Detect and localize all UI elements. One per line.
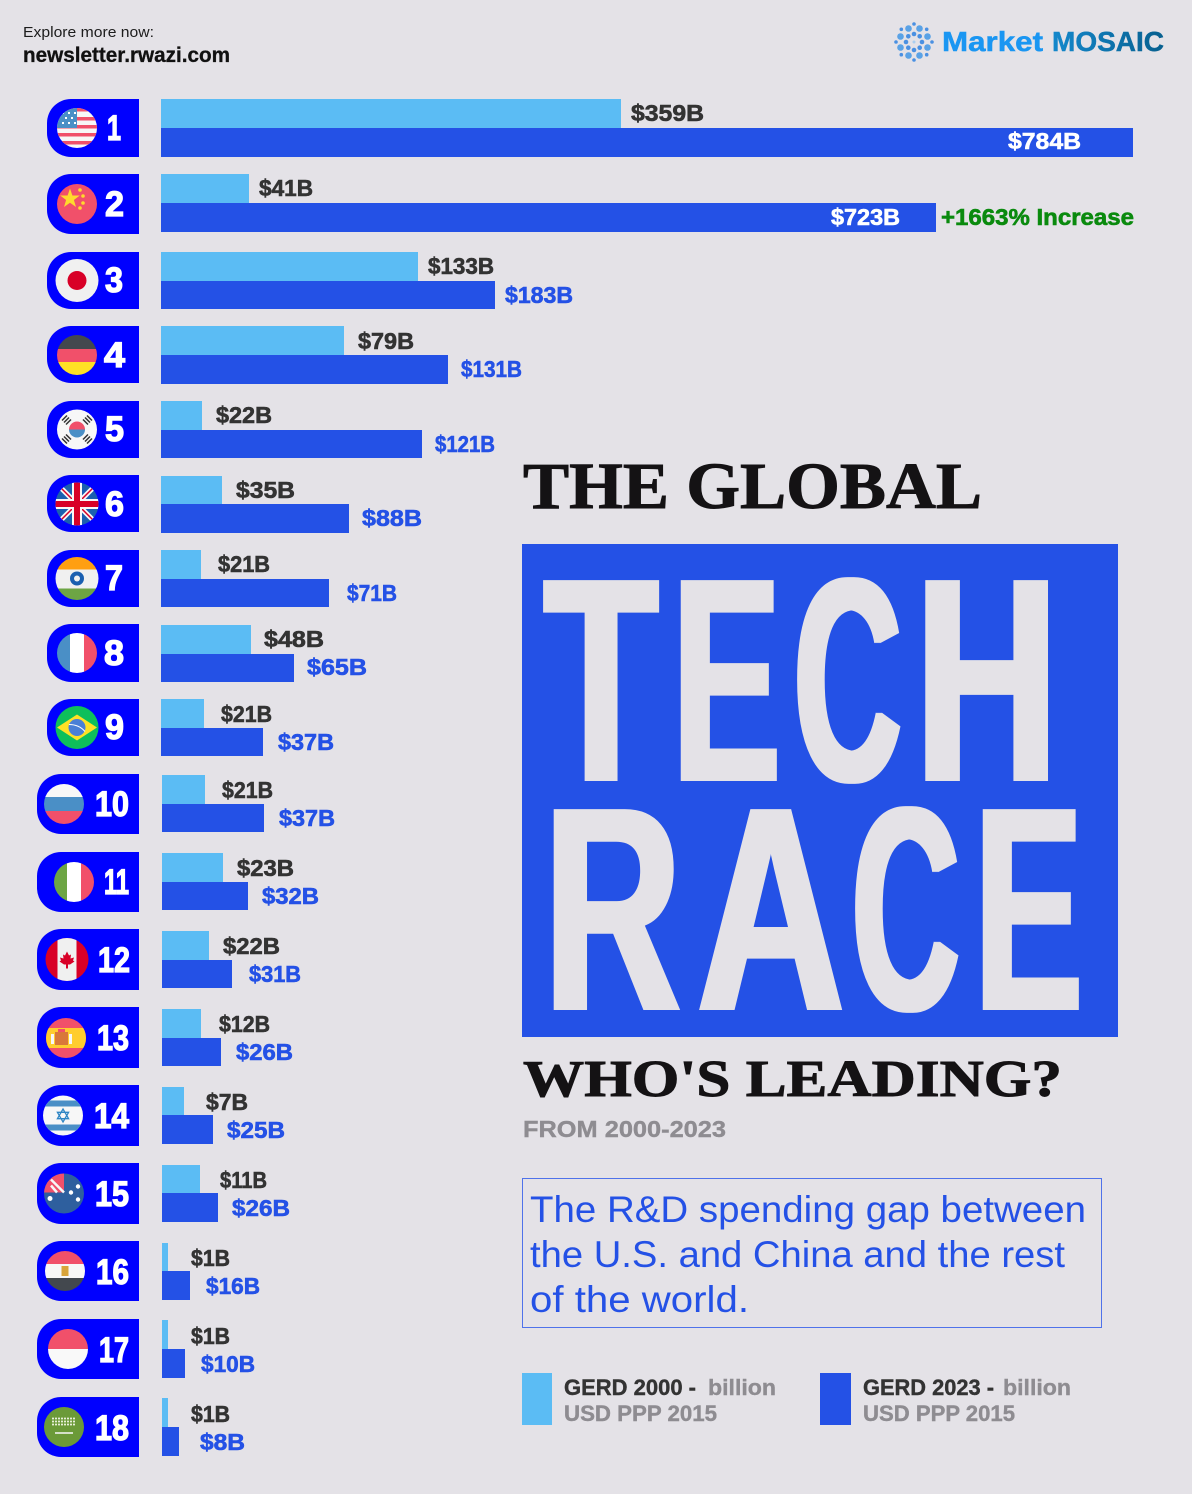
row 17: Indonesia xyxy=(37,1319,255,1379)
flag: USA xyxy=(57,108,97,148)
row 13: Spain: 13 xyxy=(97,1019,129,1058)
row 11: Italy xyxy=(37,852,319,912)
legend: GERD 2000 xyxy=(522,1373,776,1426)
row 16: Egypt: $1B xyxy=(191,1245,230,1271)
row 18: Saudi Arabia xyxy=(37,1397,245,1457)
row 3: Japan: $133B xyxy=(428,253,494,279)
row 3: Japan xyxy=(47,252,573,309)
row 16: Egypt: $16B xyxy=(206,1273,260,1299)
row 4: Germany xyxy=(47,326,522,384)
row 11: Italy: $23B xyxy=(237,855,294,881)
row 4: Germany: $131B xyxy=(461,356,522,382)
logo: Market Mosaic: MOSAIC xyxy=(1052,26,1164,57)
row 14: Israel: 14 xyxy=(94,1097,129,1136)
row 11: Italy: 11 xyxy=(104,863,129,902)
row 7: India: $21B xyxy=(218,551,270,577)
row 18: Saudi Arabia: $8B xyxy=(200,1429,245,1455)
row 14: Israel xyxy=(37,1085,285,1146)
text box: description: The R&D spending gap between xyxy=(530,1189,1086,1230)
panel: TECH RACE: C xyxy=(852,747,960,1073)
row 8: France xyxy=(47,624,367,682)
row 16: Egypt: 16 xyxy=(96,1253,129,1292)
row 8: France: 8 xyxy=(104,634,124,673)
header: explore more: newsletter.rwazi.com xyxy=(23,44,230,67)
row 4: Germany: $79B xyxy=(358,328,414,354)
row 16: Egypt xyxy=(37,1241,260,1301)
row 13: Spain: $12B xyxy=(219,1011,270,1037)
legend: GERD 2000: GERD 2000 - xyxy=(564,1375,696,1400)
row 12: Canada: $31B xyxy=(249,961,301,987)
legend: GERD 2000: USD PPP 2015 xyxy=(564,1401,717,1426)
row 12: Canada: 12 xyxy=(98,941,130,980)
row 15: Australia: $26B xyxy=(232,1195,290,1221)
row 6: United Kingdom: $35B xyxy=(236,477,295,503)
row 9: Brazil: $37B xyxy=(278,729,334,755)
value $784B: $784B xyxy=(1008,128,1081,154)
rank badge 1 xyxy=(47,99,139,157)
row 10: Russia: $21B xyxy=(222,777,273,803)
panel: TECH RACE xyxy=(522,517,1118,1073)
panel: TECH RACE: E xyxy=(673,517,780,843)
row 3: Japan: 3 xyxy=(105,261,123,300)
row 15: Australia: $11B xyxy=(220,1167,267,1193)
number 2: 2 xyxy=(105,185,124,224)
legend: GERD 2023: GERD 2023 - xyxy=(863,1375,994,1400)
date range: FROM 2000-2023 xyxy=(523,1116,726,1142)
row 5: South Korea: $121B xyxy=(435,431,495,457)
row 18: Saudi Arabia: $1B xyxy=(191,1401,230,1427)
row 6: United Kingdom: 6 xyxy=(105,485,124,524)
panel: TECH RACE: E xyxy=(975,746,1082,1072)
legend: GERD 2023: billion xyxy=(1003,1375,1071,1400)
row 12: Canada: $22B xyxy=(223,933,280,959)
title: THE GLOBAL: THE GLOBAL xyxy=(523,450,982,523)
row 13: Spain xyxy=(37,1007,293,1068)
row 5: South Korea xyxy=(47,401,495,458)
row 4: Germany: 4 xyxy=(104,336,126,375)
row 8: France: $48B xyxy=(264,626,324,652)
row 11: Italy: $32B xyxy=(262,883,319,909)
panel: TECH RACE: R xyxy=(544,747,681,1073)
row 10: Russia: $37B xyxy=(279,805,335,831)
values: $359B xyxy=(631,100,704,126)
row 8: France: $65B xyxy=(307,654,367,680)
flag: China xyxy=(57,184,97,224)
panel: TECH RACE: C xyxy=(794,518,902,844)
row 18: Saudi Arabia: 18 xyxy=(95,1409,129,1448)
callout: increase: +1663% Increase xyxy=(941,204,1134,230)
row 15: Australia xyxy=(37,1163,290,1224)
row 12: Canada xyxy=(37,929,301,990)
panel: TECH RACE: H xyxy=(915,517,1058,843)
text box: description xyxy=(522,1178,1102,1328)
rank badge 2 xyxy=(47,174,139,234)
text box: description: the U.S. and China and the rest xyxy=(530,1234,1066,1275)
panel: TECH RACE: A xyxy=(697,747,845,1073)
logo: Market Mosaic: Market xyxy=(942,26,1043,57)
value $723B: $723B xyxy=(831,204,900,230)
row 17: Indonesia: $1B xyxy=(191,1323,230,1349)
legend: GERD 2000: billion xyxy=(708,1375,776,1400)
legend: GERD 2023 xyxy=(820,1373,1071,1426)
row 6: United Kingdom: $88B xyxy=(362,505,422,531)
legend: GERD 2023: USD PPP 2015 xyxy=(863,1401,1015,1426)
number 1: 1 xyxy=(107,109,121,148)
value: $41B xyxy=(259,175,313,201)
row 14: Israel: $7B xyxy=(206,1089,248,1115)
icon: mosaic dots xyxy=(894,22,934,62)
text box: description: of the world. xyxy=(530,1279,749,1320)
header: explore more: Explore more now: xyxy=(23,24,154,41)
row 15: Australia: 15 xyxy=(95,1175,129,1214)
row 3: Japan: $183B xyxy=(505,282,573,308)
row 13: Spain: $26B xyxy=(236,1039,293,1065)
row 2: China xyxy=(47,174,936,234)
row 10: Russia: 10 xyxy=(95,785,129,824)
header: explore more xyxy=(23,24,230,67)
row 5: South Korea: 5 xyxy=(105,410,124,449)
row 10: Russia xyxy=(37,774,335,834)
logo: Market Mosaic xyxy=(894,22,1164,62)
row 14: Israel: $25B xyxy=(227,1117,285,1143)
row 1: United States xyxy=(47,99,1133,157)
panel: TECH RACE: T xyxy=(544,517,658,843)
row 6: United Kingdom xyxy=(47,475,422,533)
subtitle: WHO'S LEADING?: WHO'S LEADING? xyxy=(523,1051,1062,1108)
row 5: South Korea: $22B xyxy=(216,402,272,428)
row 9: Brazil xyxy=(47,699,334,756)
row 17: Indonesia: 17 xyxy=(99,1331,129,1370)
bars xyxy=(161,174,249,203)
bars: 2000 and 2023 xyxy=(161,99,621,128)
row 17: Indonesia: $10B xyxy=(201,1351,255,1377)
row 7: India xyxy=(47,550,397,607)
row 9: Brazil: 9 xyxy=(105,708,124,747)
row 7: India: $71B xyxy=(347,580,397,606)
row 9: Brazil: $21B xyxy=(221,701,272,727)
row 7: India: 7 xyxy=(105,559,123,598)
